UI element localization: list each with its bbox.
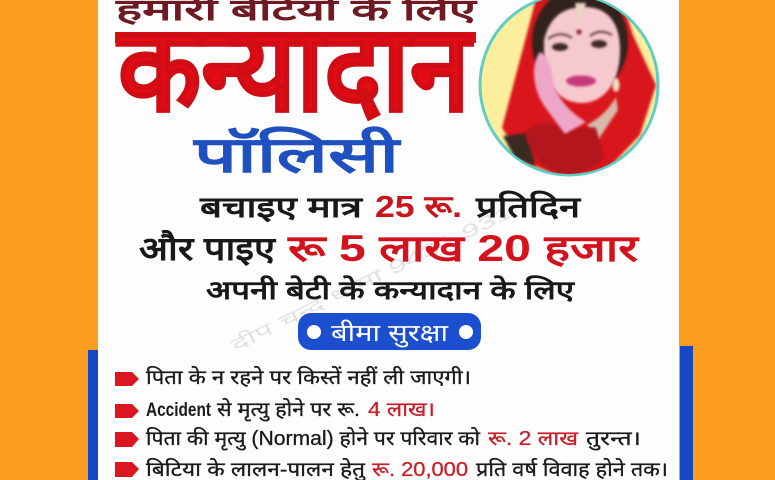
necklace (587, 97, 618, 140)
benefit 2 (115, 398, 435, 422)
badge: insurance cover: बीमा सुरक्षा (331, 319, 449, 348)
benefit 1: पिता के न रहने पर किस्तें नहीं ली जाएगी। (146, 366, 471, 389)
benefit 3: रू. 2 लाख (488, 428, 579, 450)
benefit 2: से मृत्यु होने पर रू. (217, 398, 360, 422)
benefit 3: पिता की मृत्यु (Normal) होने पर परिवार को (146, 427, 481, 451)
line: save only 25 rupees daily (199, 189, 581, 224)
benefit 2: Accident (146, 400, 212, 421)
benefit 2: 4 लाख। (368, 399, 435, 421)
blue side band left (88, 350, 100, 480)
photo: girl in red veil (480, 0, 658, 176)
face (544, 7, 620, 103)
bangles (525, 123, 604, 174)
benefit 3: तुरन्त। (586, 428, 641, 451)
line: save only 25 rupees daily: 25 रू. (375, 189, 462, 224)
line: get 5 lakh 20 thousand: रू 5 लाख 20 हजार (287, 228, 640, 269)
dark sleeve (503, 133, 535, 166)
hair (532, 0, 628, 96)
line: get 5 lakh 20 thousand: और पाइए (139, 229, 277, 267)
subtitle: policy: पॉलिसी (192, 126, 402, 183)
blue side band right (680, 346, 693, 480)
hand (534, 52, 586, 134)
benefit 4 (115, 458, 668, 480)
line: save only 25 rupees daily: प्रतिदिन (475, 190, 581, 224)
badge: insurance cover (298, 313, 481, 350)
watermark: दीप चन्द धामा 9431 931 (228, 201, 515, 356)
line: for your daughter's kanyadan: अपनी बेटी के कन्यादान के लिए (206, 275, 576, 305)
title: kanyadan: कन्यादान (116, 2, 474, 136)
line: save only 25 rupees daily: बचाइए मात्र (199, 192, 363, 224)
line: get 5 lakh 20 thousand (139, 228, 640, 269)
benefit 3 (115, 427, 641, 451)
red veil (502, 0, 656, 176)
eyes, bindi and lips (548, 3, 620, 92)
white poster panel (98, 0, 679, 480)
